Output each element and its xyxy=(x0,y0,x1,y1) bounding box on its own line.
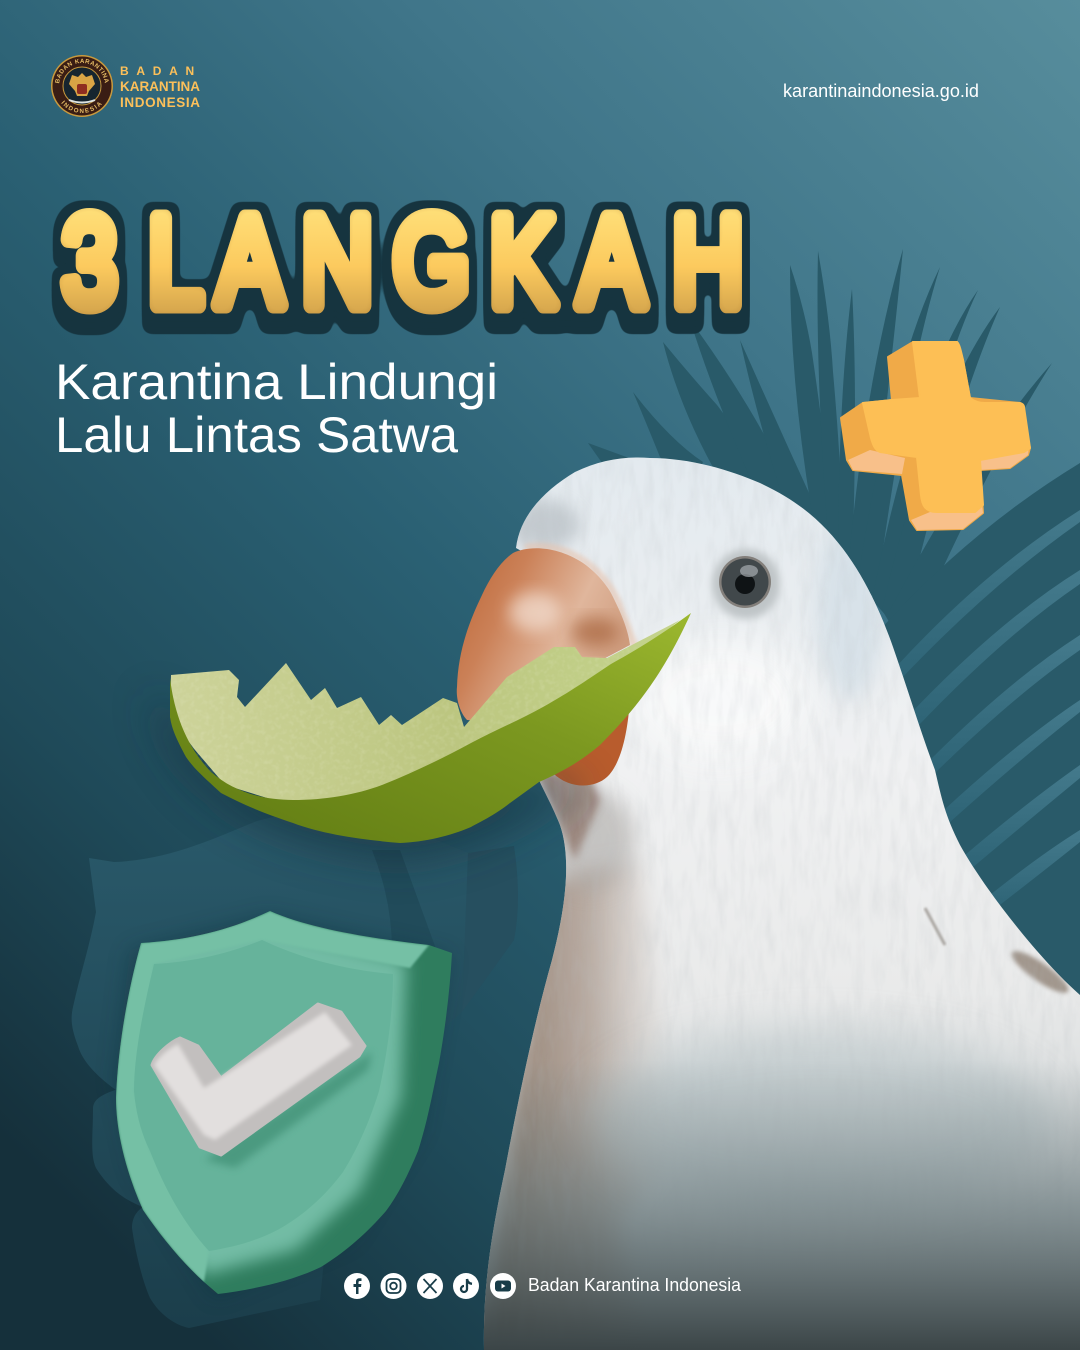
parrot body xyxy=(484,458,1080,1350)
icon: x xyxy=(417,1273,443,1299)
logo wordmark xyxy=(120,64,202,110)
logo wordmark: KARANTINA xyxy=(120,79,200,94)
ghost shield pattern xyxy=(72,800,518,1328)
subtitle: Lalu Lintas Satwa xyxy=(55,407,458,463)
melon slice xyxy=(150,613,691,862)
plus bottom light edges xyxy=(848,446,1029,530)
plus back faces xyxy=(841,342,1030,530)
parrot xyxy=(457,458,1080,1350)
palm frond gaps xyxy=(895,510,1080,908)
plus front face xyxy=(863,342,1030,512)
logo badge: BADAN KARANTINA xyxy=(54,58,109,84)
subtitle: Karantina Lindungi xyxy=(55,354,498,410)
melon shadow xyxy=(150,690,590,862)
shield inner face xyxy=(134,940,393,1251)
shield bevel glow xyxy=(130,935,395,1262)
website address: karantinaindonesia.go.id xyxy=(783,81,979,101)
peach feathers around beak xyxy=(525,547,636,650)
logo wordmark: BADAN xyxy=(120,64,202,78)
icon: instagram xyxy=(380,1273,406,1299)
shield body xyxy=(116,911,452,1294)
social handle: Badan Karantina Indonesia xyxy=(528,1275,742,1295)
logo badge xyxy=(51,55,113,117)
icon: tiktok xyxy=(453,1273,479,1299)
social icons xyxy=(344,1273,516,1299)
title: 3 LANGKAH xyxy=(62,191,743,332)
logo xyxy=(51,55,202,117)
melon flesh xyxy=(170,620,680,806)
parrot eye xyxy=(712,549,780,619)
icon: facebook xyxy=(344,1273,370,1299)
check mark xyxy=(152,1004,372,1168)
plus icon xyxy=(841,342,1030,530)
icon: youtube xyxy=(490,1273,516,1299)
parrot lower beak xyxy=(545,697,630,786)
beak highlight and mouth shadow xyxy=(509,592,619,647)
shield with check icon xyxy=(115,911,452,1298)
feather shading xyxy=(484,460,1080,1350)
logo wordmark: INDONESIA xyxy=(120,95,200,110)
subtitle xyxy=(55,354,498,463)
shield drop shadow xyxy=(115,915,450,1298)
parrot upper beak xyxy=(457,548,630,720)
shield lit rim xyxy=(116,911,429,1282)
check shadow xyxy=(205,1052,372,1168)
palm leaves background xyxy=(588,249,1080,1000)
melon peel xyxy=(170,613,691,843)
logo badge: INDONESIA xyxy=(61,100,102,113)
